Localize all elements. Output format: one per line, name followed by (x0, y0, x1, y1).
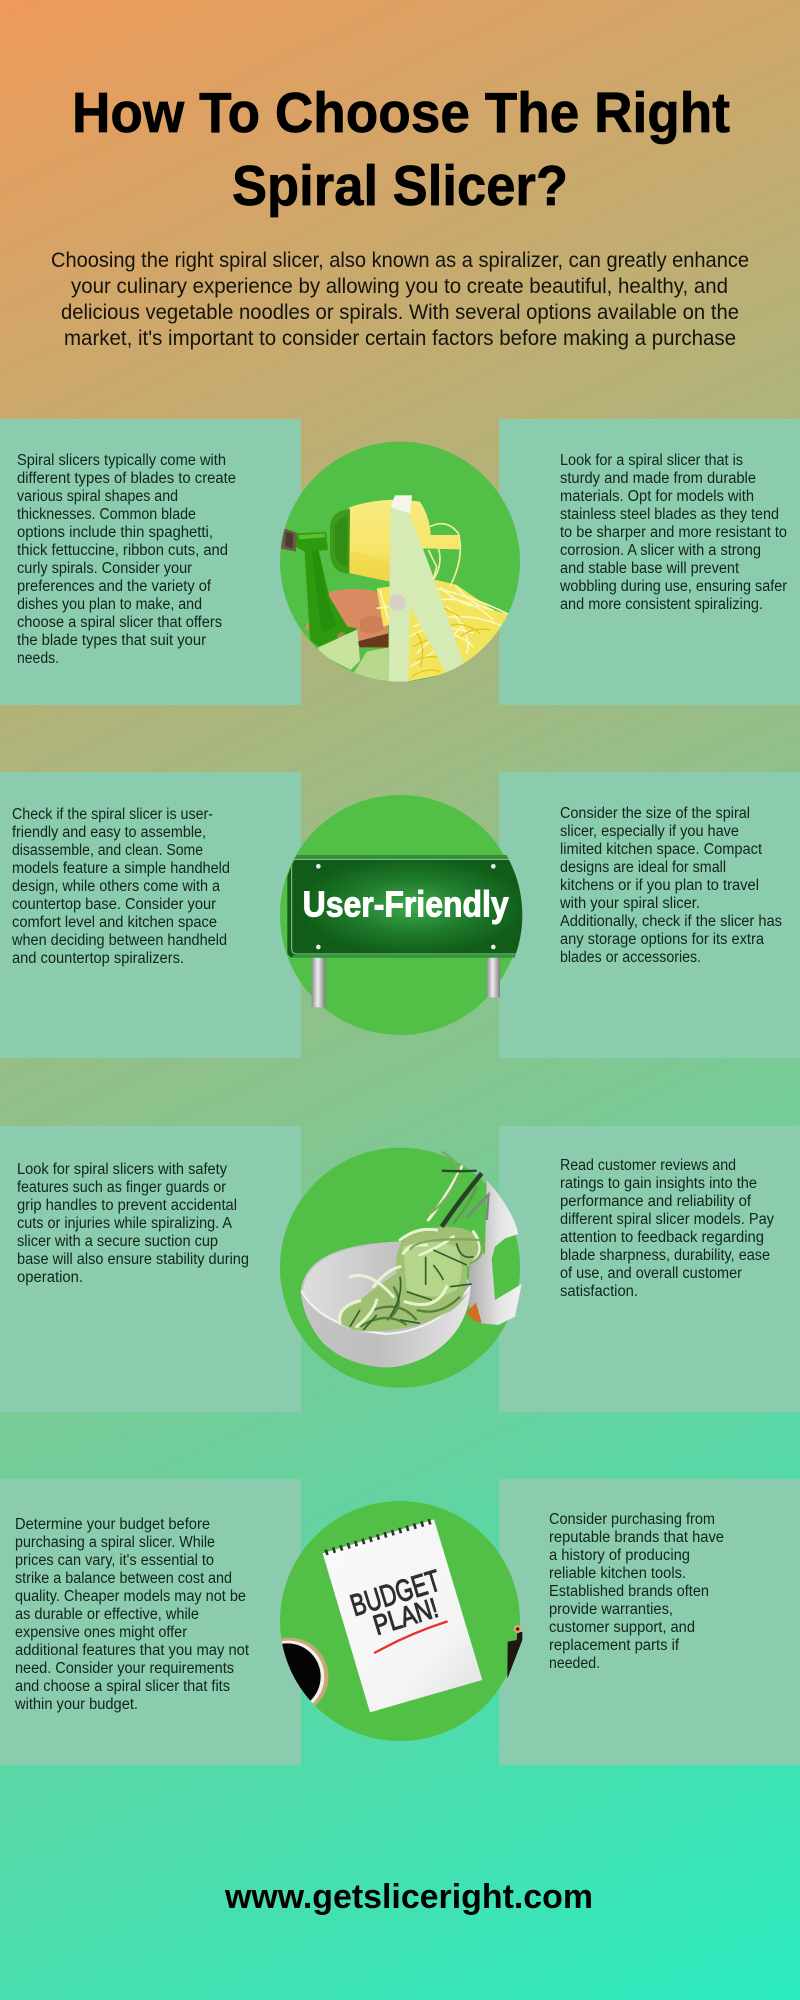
panel: customer reviews (499, 1126, 800, 1412)
text: reputable brands (549, 1511, 724, 1672)
text: budget: prices can vary, it's essential to (15, 1552, 214, 1569)
text: safety features: Look for spiral slicers with safety (17, 1161, 227, 1178)
text: reputable brands: reliable kitchen tools. (549, 1565, 686, 1582)
text: ease of use: friendly and easy to assemble, (12, 824, 206, 841)
text: safety features: features such as finger guards or (17, 1179, 226, 1196)
text: blade types: the blade types that suit your (17, 632, 206, 649)
text: build quality: sturdy and made from durable (560, 470, 756, 487)
text: size and storage: designs are ideal for small (560, 859, 726, 876)
title: Spiral Slicer? (232, 154, 568, 218)
text: reputable brands: customer support, and (549, 1619, 695, 1636)
sign label: User-Friendly (303, 884, 509, 925)
text: size and storage: with your spiral slicer. (559, 895, 700, 912)
text: build quality: materials. Opt for models with (560, 488, 754, 505)
text: size and storage: kitchens or if you plan to travel (560, 877, 759, 894)
text: build quality: corrosion. A slicer with a strong (560, 542, 761, 559)
text: reputable brands: needed. (549, 1655, 600, 1672)
text: blade types: curly spirals. Consider your (17, 560, 192, 577)
text: safety features (17, 1161, 249, 1286)
text: size and storage: limited kitchen space. Compact (560, 841, 763, 858)
panel: blade types (0, 419, 301, 705)
text: reputable brands: Consider purchasing from (549, 1511, 715, 1528)
title: How To Choose The Right (72, 81, 730, 145)
panel: build quality (499, 419, 800, 705)
text: ease of use: countertop base. Consider your (12, 896, 216, 913)
text: budget: purchasing a spiral slicer. While (15, 1534, 215, 1551)
text: ease of use: when deciding between handheld (11, 932, 227, 949)
text: ease of use: and countertop spiralizers. (12, 950, 184, 967)
text: safety features: base will also ensure stability during (17, 1251, 249, 1268)
text: budget: and choose a spiral slicer that fits (15, 1678, 230, 1695)
intro paragraph: delicious vegetable noodles or spirals. With several options available on the (61, 301, 739, 324)
text: blade types: preferences and the variety of (17, 578, 212, 595)
text: reputable brands: reputable brands that have (549, 1529, 724, 1546)
text: ease of use: disassemble, and clean. Some (12, 842, 203, 859)
text: ease of use: comfort level and kitchen space (12, 914, 217, 931)
text: customer reviews: Read customer reviews and (560, 1157, 736, 1174)
intro paragraph: Choosing the right spiral slicer, also known as a spiralizer, can greatly enhance (51, 249, 749, 272)
title (72, 81, 730, 218)
handwritten note text (346, 1564, 452, 1646)
panel: budget (0, 1479, 301, 1765)
text: budget: Determine your budget before (15, 1516, 210, 1533)
text: ease of use: design, while others come with a (12, 878, 220, 895)
text: size and storage: blades or accessories. (560, 949, 701, 966)
icon: bowl of zucchini noodles in green circle (280, 1148, 522, 1388)
text: ease of use: Check if the spiral slicer is user- (12, 806, 213, 823)
text: customer reviews: different spiral slicer models. Pay (560, 1211, 774, 1228)
text: budget: quality. Cheaper models may not be (15, 1588, 246, 1605)
text: budget: within your budget. (14, 1696, 138, 1713)
text: safety features: cuts or injuries while spiralizing. A (17, 1215, 233, 1232)
text: customer reviews: ratings to gain insights into the (560, 1175, 757, 1192)
text: budget: additional features that you may not (15, 1642, 250, 1659)
panel: safety features (0, 1126, 301, 1412)
panel: size and storage (499, 772, 800, 1058)
text: build quality (559, 452, 787, 613)
text: reputable brands: Established brands often (549, 1583, 709, 1600)
text: blade types: various spiral shapes and (17, 488, 178, 505)
text: blade types: different types of blades to create (17, 470, 236, 487)
text: customer reviews: attention to feedback regarding (560, 1229, 764, 1246)
text: blade types (17, 452, 236, 667)
handwritten note text: BUDGET (346, 1564, 445, 1623)
text: build quality: and more consistent spiralizing. (560, 596, 763, 613)
text: blade types: Spiral slicers typically come with (17, 452, 226, 469)
text: reputable brands: replacement parts if (549, 1637, 680, 1654)
text: safety features: slicer with a secure suction cup (17, 1233, 218, 1250)
panel: reputable brands (499, 1479, 800, 1765)
text: size and storage: Additionally, check if the slicer has (560, 913, 782, 930)
text: customer reviews (560, 1157, 774, 1300)
website url: www.getsliceright.com (224, 1878, 593, 1916)
text: blade types: options include thin spaghetti, (17, 524, 213, 541)
intro paragraph: market, it's important to consider certain factors before making a purchase (64, 327, 736, 350)
text: reputable brands: provide warranties, (549, 1601, 673, 1618)
text: size and storage: any storage options for its extra (560, 931, 764, 948)
text: build quality: and stable base will prevent (560, 560, 740, 577)
text: size and storage (559, 805, 782, 966)
panel: ease of use (0, 772, 301, 1058)
text: budget: need. Consider your requirements (15, 1660, 234, 1677)
text: budget (14, 1516, 250, 1713)
text: blade types: thick fettuccine, ribbon cuts, and (17, 542, 228, 559)
text: build quality: Look for a spiral slicer that is (560, 452, 743, 469)
icon: budget plan notepad in green circle (280, 1501, 522, 1741)
text: build quality: stainless steel blades as they tend (560, 506, 779, 523)
handwritten note text: PLAN! (370, 1592, 442, 1641)
text: blade types: needs. (17, 650, 59, 667)
text: build quality: to be sharper and more resistant to (560, 524, 787, 541)
text: customer reviews: satisfaction. (560, 1283, 638, 1300)
text: blade types: thicknesses. Common blade (17, 506, 196, 523)
text: size and storage: Consider the size of the spiral (560, 805, 750, 822)
text: budget: as durable or effective, while (15, 1606, 199, 1623)
text: safety features: grip handles to prevent accidental (17, 1197, 237, 1214)
intro paragraph (51, 249, 749, 350)
text: blade types: choose a spiral slicer that offers (17, 614, 222, 631)
text: customer reviews: blade sharpness, durability, ease (560, 1247, 770, 1264)
icon: spiral slicer photo in green circle (280, 442, 520, 683)
text: reputable brands: a history of producing (549, 1547, 690, 1564)
text: budget: expensive ones might offer (15, 1624, 187, 1641)
text: budget: strike a balance between cost and (15, 1570, 232, 1587)
text: ease of use: models feature a simple handheld (12, 860, 230, 877)
text: customer reviews: performance and reliability of (560, 1193, 752, 1210)
text: ease of use (11, 806, 230, 967)
text: build quality: wobbling during use, ensuring safer (559, 578, 787, 595)
icon: user-friendly road sign in green circle (280, 795, 532, 1035)
text: blade types: dishes you plan to make, and (17, 596, 202, 613)
text: safety features: operation. (17, 1269, 83, 1286)
text: size and storage: slicer, especially if you have (560, 823, 739, 840)
intro paragraph: your culinary experience by allowing you to create beautiful, healthy, and (71, 275, 728, 298)
text: customer reviews: of use, and overall customer (560, 1265, 742, 1282)
